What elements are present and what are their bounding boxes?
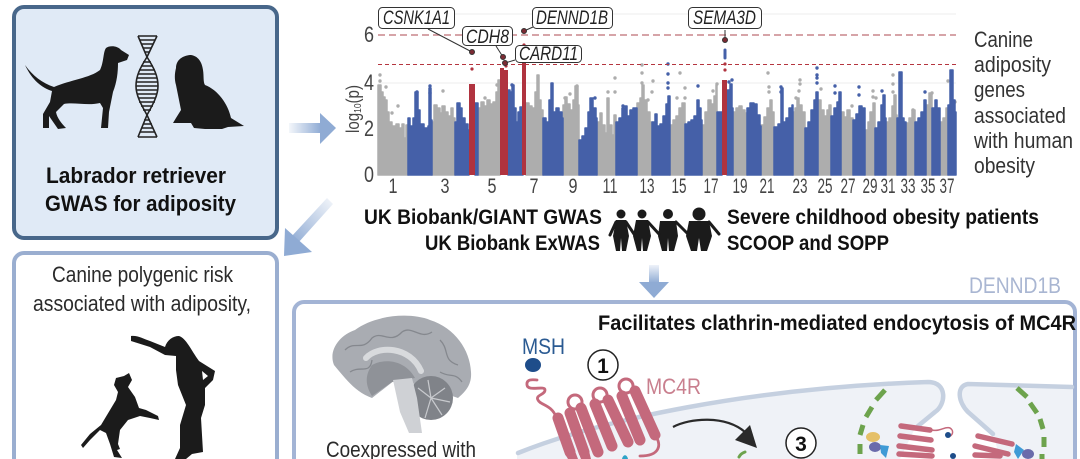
heading: Labrador retriever GWAS for adiposity bbox=[45, 163, 237, 216]
icon: internalized receptor left bbox=[899, 426, 953, 456]
gene label: CDH8: CDH8 bbox=[466, 27, 509, 48]
icon: MC4R receptor bbox=[527, 379, 659, 459]
text: severe childhood obesity cohorts bbox=[727, 206, 1039, 255]
icon: internalized receptor right bbox=[975, 436, 1012, 456]
chromosome axis labels bbox=[388, 175, 954, 198]
gene label: SEMA3D: SEMA3D bbox=[693, 8, 756, 29]
y axis numbers: 6 bbox=[364, 22, 374, 47]
gene label: CSNK1A1: CSNK1A1 bbox=[383, 8, 450, 29]
clathrin coat left bbox=[860, 390, 885, 454]
text: canine adiposity genes note: Canine bbox=[974, 27, 1033, 52]
text: canine adiposity genes note bbox=[973, 27, 1073, 178]
gene leaders bbox=[428, 27, 728, 66]
icon: standing Labrador bbox=[25, 46, 129, 129]
y axis label: log bbox=[343, 109, 363, 133]
y axis numbers: 4 bbox=[364, 70, 374, 95]
chromosome axis labels: 11 bbox=[602, 175, 618, 198]
step marker 3: 3 bbox=[795, 433, 807, 456]
label: MSH: MSH bbox=[522, 334, 565, 359]
arrow: to Manhattan plot bbox=[289, 113, 336, 144]
icon: person silhouette bbox=[131, 336, 215, 459]
text: severe childhood obesity cohorts: Severe childhood obesity patients bbox=[727, 206, 1039, 229]
chromosome axis labels: 3 bbox=[440, 175, 450, 198]
panel: Labrador retriever GWAS bbox=[14, 7, 277, 238]
icon: MSH ligand bbox=[525, 358, 541, 372]
chromosome axis labels: 17 bbox=[704, 175, 718, 198]
chromosome axis labels: 29 bbox=[862, 175, 878, 198]
chromosome axis labels: 33 bbox=[900, 175, 916, 198]
text: human GWAS cohorts bbox=[364, 206, 602, 255]
icon: MSH dots bbox=[945, 432, 956, 459]
significance thresholds bbox=[378, 35, 956, 64]
icon: jumping dog silhouette bbox=[81, 373, 159, 458]
chromosome axis labels: 31 bbox=[880, 175, 896, 198]
blue outlier points bbox=[417, 64, 925, 106]
gene label: DENND1B: DENND1B bbox=[536, 8, 608, 29]
text: canine polygenic risk bbox=[33, 262, 251, 316]
text: canine polygenic risk: Canine polygenic risk bbox=[52, 262, 234, 287]
chromosome axis labels: 5 bbox=[488, 175, 496, 198]
icon: adaptor blue bbox=[622, 455, 628, 459]
red points bbox=[472, 45, 725, 70]
text: human GWAS cohorts: UK Biobank ExWAS bbox=[425, 232, 600, 255]
gray outlier points bbox=[380, 65, 955, 113]
icon: adaptor proteins right bbox=[1014, 444, 1034, 459]
chromosome axis labels: 1 bbox=[388, 175, 398, 198]
text: canine adiposity genes note: obesity bbox=[974, 153, 1035, 178]
icon: seated Newfoundland dog bbox=[173, 55, 244, 129]
label: MSH bbox=[522, 334, 565, 372]
blue chromosomes bbox=[408, 70, 956, 175]
heading: Labrador retriever GWAS for adiposity: Labrador retriever bbox=[46, 163, 226, 188]
chromosome axis labels: 15 bbox=[672, 175, 686, 198]
chromosome axis labels: 27 bbox=[840, 175, 856, 198]
cell interior and membrane bbox=[517, 382, 1073, 459]
gene label: CARD11: CARD11 bbox=[519, 44, 578, 65]
text: human GWAS cohorts: UK Biobank/GIANT GWAS bbox=[364, 206, 602, 229]
chart: Manhattan plot bbox=[343, 8, 956, 198]
label: MC4R: MC4R bbox=[646, 374, 701, 399]
y axis label: 10 bbox=[353, 103, 364, 113]
text: canine adiposity genes note: adiposity bbox=[974, 52, 1051, 77]
chromosome axis labels: 23 bbox=[792, 175, 808, 198]
chromosome axis labels: 9 bbox=[568, 175, 578, 198]
panel: canine polygenic risk bbox=[14, 253, 277, 459]
icon: adaptor proteins left bbox=[866, 432, 889, 458]
text: canine polygenic risk: associated with adiposity, bbox=[33, 291, 251, 316]
chromosome axis labels: 13 bbox=[640, 175, 654, 198]
icon: brain cross-section bbox=[332, 316, 471, 433]
y axis numbers: 0 bbox=[364, 162, 374, 187]
clathrin coat right bbox=[1017, 388, 1044, 459]
y axis numbers bbox=[364, 22, 374, 187]
text: severe childhood obesity cohorts: SCOOP and SOPP bbox=[727, 232, 889, 255]
icon: four people holding hands bbox=[610, 208, 719, 251]
chromosome axis labels: 19 bbox=[732, 175, 748, 198]
arrow: to DENND1B panel bbox=[639, 265, 669, 298]
step marker 3 bbox=[786, 428, 816, 458]
y axis label: (p) bbox=[343, 85, 363, 103]
chromosome axis labels: 25 bbox=[818, 175, 832, 198]
red highlighted loci bbox=[469, 62, 727, 175]
arrow: internalization bbox=[673, 420, 757, 448]
chromosome axis labels: 7 bbox=[530, 175, 538, 198]
arrow: to polygenic risk panel bbox=[284, 198, 333, 256]
step marker 1: 1 bbox=[597, 355, 609, 378]
heading: Labrador retriever GWAS for adiposity: GWAS for adiposity bbox=[45, 191, 237, 216]
panel: DENND1B mechanism bbox=[294, 302, 1076, 459]
chromosome axis labels: 37 bbox=[940, 175, 954, 198]
step marker 1 bbox=[588, 350, 618, 380]
gray chromosomes bbox=[378, 75, 948, 175]
chromosome axis labels: 21 bbox=[760, 175, 774, 198]
icon: DNA helix bbox=[136, 36, 158, 137]
text: canine adiposity genes note: associated bbox=[974, 103, 1066, 128]
chromosome axis labels: 35 bbox=[920, 175, 936, 198]
label: DENND1B: DENND1B bbox=[969, 273, 1061, 298]
y axis numbers: 2 bbox=[364, 116, 374, 141]
text: canine adiposity genes note: genes bbox=[974, 77, 1025, 102]
